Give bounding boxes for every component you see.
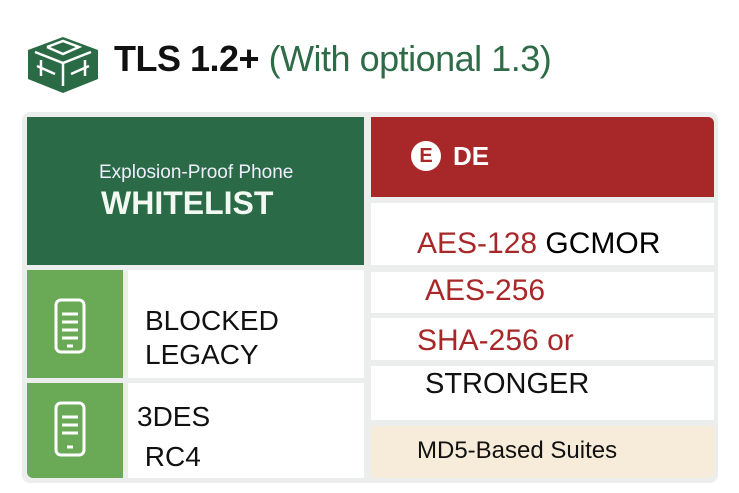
row: MD5	[371, 426, 714, 478]
text: 3DES RC4: RC4	[145, 441, 201, 472]
panel: whitelist header	[27, 117, 364, 265]
row: stronger: STRONGER	[425, 368, 589, 400]
row: AES-128: AES-128 GCMOR	[417, 227, 660, 260]
icon: document	[27, 270, 123, 378]
panel: table	[22, 112, 718, 483]
row: blocked legacy	[27, 270, 364, 378]
text: 3DES RC4: 3DES	[137, 401, 210, 432]
text: blocked legacy	[145, 305, 279, 370]
row: AES-256	[371, 272, 714, 313]
row: stronger	[371, 366, 714, 420]
heading: DE: DE	[453, 141, 489, 171]
icon: E badge: E	[419, 145, 433, 167]
row: AES-256: AES-256	[425, 274, 545, 307]
icon: E badge	[411, 141, 441, 171]
row: AES-128	[371, 203, 714, 265]
text: 3DES RC4	[137, 401, 210, 472]
subtitle: Explosion-Proof Phone	[99, 162, 293, 183]
text: blocked legacy: LEGACY	[145, 339, 259, 370]
icon: green cube	[28, 37, 98, 93]
heading: whitelist: WHITELIST	[101, 185, 273, 221]
row: SHA-256	[371, 318, 714, 360]
icon: document	[27, 383, 123, 478]
title: TLS 1.2+ (With optional 1.3)	[114, 38, 551, 79]
text: blocked legacy: BLOCKED	[145, 305, 279, 336]
row: 3DES RC4	[27, 383, 364, 478]
row: SHA-256: SHA-256 or	[417, 324, 574, 357]
row: MD5: MD5-Based Suites	[417, 437, 617, 464]
panel: DE header	[371, 117, 714, 197]
